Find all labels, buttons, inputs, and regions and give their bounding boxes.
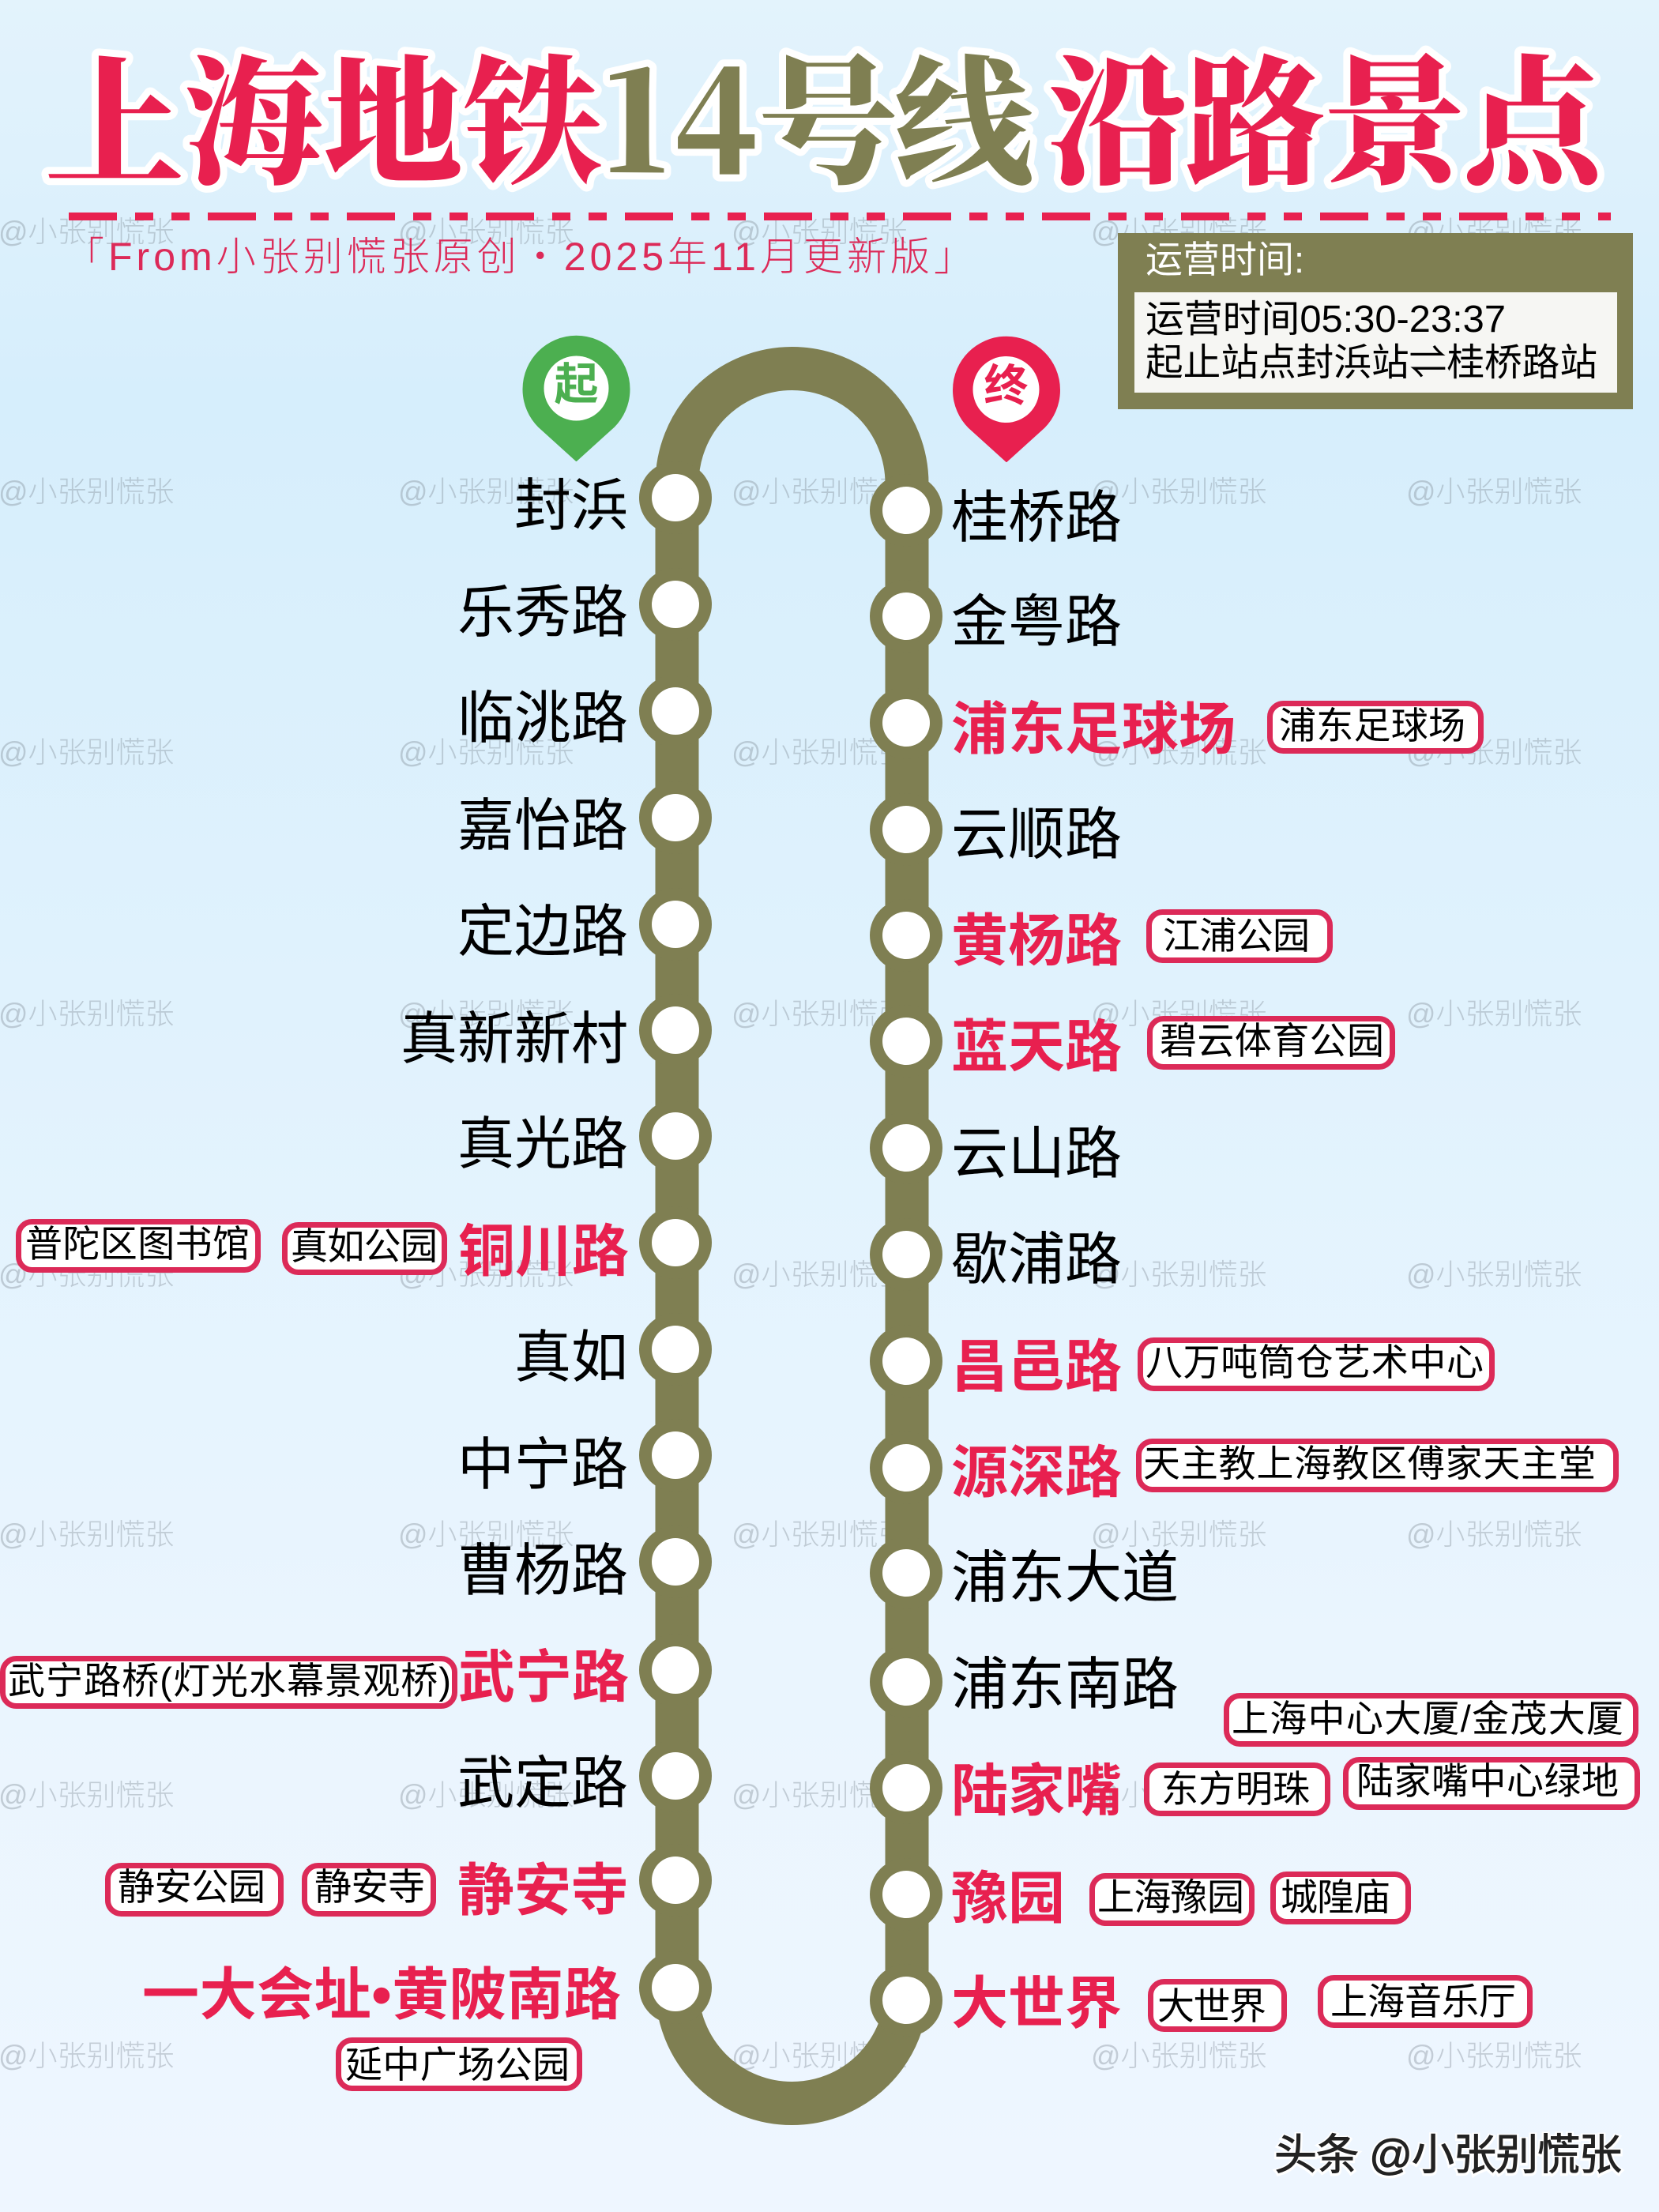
station: 昌邑路 [870,1325,1492,1399]
watermarks: @小张别慌张 [1406,1779,1582,1811]
station: 蓝天路 [870,1005,1392,1079]
tag: 上海中心大厦/金茂大厦: 上海中心大厦/金茂大厦 [1232,1698,1623,1740]
tag: 浦东足球场: 浦东足球场 [1279,705,1465,747]
watermarks: @小张别慌张 [1091,476,1267,508]
tag: 江浦公园: 江浦公园 [1163,915,1310,957]
watermarks: @小张别慌张 [0,216,175,248]
watermarks: @小张别慌张 [398,2040,574,2072]
title: 沿路景点 [1048,13,1613,213]
station: 曹杨路: 曹杨路 [457,1540,628,1603]
tag: 东方明珠: 东方明珠 [1161,1768,1310,1810]
watermarks: @小张别慌张 [732,1518,908,1551]
station: 真新新村: 真新新村 [401,1008,628,1071]
title: 号线 [758,13,1033,213]
title: 上海地铁 [45,13,602,213]
title [45,13,1613,213]
watermarks: @小张别慌张 [732,216,908,248]
watermarks: @小张别慌张 [732,736,908,769]
station: 真光路 [457,1100,712,1176]
tag: 碧云体育公园: 碧云体育公园 [1160,1020,1384,1062]
station: 临洮路 [457,675,712,750]
station: 云顺路 [870,793,1122,867]
watermarks: @小张别慌张 [732,476,908,508]
icon: end pin: 终 [984,361,1029,411]
watermarks: @小张别慌张 [0,1779,175,1811]
station: 豫园: 豫园 [951,1868,1065,1931]
tag: 大世界: 大世界 [1157,1985,1266,2027]
station: 曹杨路 [457,1525,712,1603]
panel body [1134,292,1617,393]
watermarks: @小张别慌张 [1091,1258,1267,1291]
station: 云山路 [870,1112,1122,1186]
station: 浦东足球场 [870,687,1480,762]
tag: 静安公园: 静安公园 [118,1866,265,1908]
station: 陆家嘴 [870,1751,1637,1824]
watermarks: @小张别慌张 [0,998,175,1030]
station: 乐秀路 [457,568,712,645]
tag: 陆家嘴中心绿地: 陆家嘴中心绿地 [1356,1760,1619,1802]
panel body: 起止站点封浜站⇌桂桥路站 [1146,342,1597,384]
tag: 普陀区图书馆: 普陀区图书馆 [25,1223,250,1265]
station: 桂桥路: 桂桥路 [951,487,1122,550]
footer credit: 头条 @小张别慌张 [1274,2132,1622,2180]
tag: 延中广场公园: 延中广场公园 [345,2044,570,2086]
watermarks: @小张别慌张 [1406,736,1582,769]
station: 嘉怡路 [457,781,712,858]
watermarks: @小张别慌张 [732,998,908,1030]
station: 临洮路: 临洮路 [457,687,628,750]
tag: 上海音乐厅: 上海音乐厅 [1330,1981,1516,2022]
icon: end pin [954,337,1059,461]
watermarks: @小张别慌张 [1091,2040,1267,2072]
station: 歇浦路 [870,1218,1122,1292]
station: 铜川路: 铜川路 [458,1221,629,1284]
tag: 真如公园: 真如公园 [291,1225,438,1267]
station: 黄杨路 [870,899,1330,973]
station: 武定路 [457,1740,712,1815]
watermarks: @小张别慌张 [398,1518,574,1551]
watermarks: @小张别慌张 [398,476,574,508]
station: 大世界: 大世界 [951,1973,1122,2036]
watermarks: @小张别慌张 [1091,736,1267,769]
watermarks: @小张别慌张 [0,1518,175,1551]
station: 武宁路: 武宁路 [458,1646,629,1710]
station: 浦东足球场: 浦东足球场 [951,698,1236,762]
station: 定边路: 定边路 [457,901,628,964]
subtitle: 「From小张别慌张原创・2025年11月更新版」 [65,235,973,279]
metro line loop [677,369,907,2104]
station: 真光路: 真光路 [457,1113,628,1176]
watermarks: @小张别慌张 [398,736,574,769]
watermarks: @小张别慌张 [1091,1518,1267,1551]
station: 浦东大道 [870,1537,1179,1610]
watermarks: @小张别慌张 [732,2040,908,2072]
panel body: 运营时间05:30-23:37 [1146,299,1506,340]
watermarks: @小张别慌张 [398,1779,574,1811]
tag: 上海豫园: 上海豫园 [1097,1876,1244,1918]
station: 封浜: 封浜 [514,475,628,538]
station: 一大会址•黄陂南路: 一大会址•黄陂南路 [142,1964,621,2027]
station: 大世界 [870,1964,1529,2037]
station: 陆家嘴: 陆家嘴 [951,1760,1122,1823]
station: 武宁路 [3,1634,712,1710]
station: 真新新村 [401,994,712,1071]
station: 静安寺: 静安寺 [457,1860,628,1923]
station: 乐秀路: 乐秀路 [457,581,628,645]
station: 浦东大道: 浦东大道 [951,1547,1179,1610]
panel heading: 运营时间: [1146,239,1304,280]
station: 铜川路 [19,1206,712,1284]
station: 真如 [514,1313,712,1390]
station: 武定路: 武定路 [457,1752,628,1815]
icon: start pin: 起 [555,359,599,409]
tag: 八万吨筒仓艺术中心: 八万吨筒仓艺术中心 [1146,1341,1484,1383]
station: 云顺路: 云顺路 [951,803,1122,867]
station: 中宁路: 中宁路 [457,1434,628,1497]
watermarks: @小张别慌张 [398,998,574,1030]
watermarks: @小张别慌张 [732,1779,908,1811]
station: 真如: 真如 [514,1326,628,1390]
station: 蓝天路: 蓝天路 [951,1016,1122,1079]
station: 定边路 [457,888,712,964]
watermarks: @小张别慌张 [732,1258,908,1291]
station: 浦东南路: 浦东南路 [951,1653,1179,1717]
tag: 城隍庙: 城隍庙 [1281,1876,1390,1918]
dashed divider [69,213,1611,220]
station: 昌邑路: 昌邑路 [951,1336,1122,1399]
watermarks: @小张别慌张 [1406,2040,1582,2072]
watermarks: @小张别慌张 [1406,216,1582,248]
station: 源深路 [870,1431,1616,1505]
watermarks: @小张别慌张 [0,1258,175,1291]
station: 静安寺 [107,1844,712,1923]
watermarks: @小张别慌张 [1091,1779,1267,1811]
watermarks: @小张别慌张 [398,1258,574,1291]
station: 浦东南路 [870,1646,1635,1744]
watermarks: @小张别慌张 [0,2040,175,2072]
footer credit: 头条 @小张别慌张 [1274,2131,1622,2179]
station: 中宁路 [457,1419,712,1497]
title: 14 [604,13,758,213]
station: 源深路: 源深路 [951,1442,1122,1505]
tag: 武宁路桥: 武宁路桥(灯光水幕景观桥) [8,1660,451,1702]
watermarks: @小张别慌张 [1406,476,1582,508]
station: 嘉怡路: 嘉怡路 [457,795,628,858]
watermarks: @小张别慌张 [1406,1518,1582,1551]
watermarks: @小张别慌张 [1406,1258,1582,1291]
watermarks: @小张别慌张 [398,216,574,248]
station: 豫园 [870,1858,1408,1931]
watermarks: @小张别慌张 [1406,998,1582,1030]
watermarks: @小张别慌张 [1091,216,1267,248]
watermarks: @小张别慌张 [1091,998,1267,1030]
station: 歇浦路: 歇浦路 [951,1228,1122,1292]
station: 黄杨路: 黄杨路 [951,910,1122,973]
panel: operating hours [1118,233,1633,409]
tag: 静安寺: 静安寺 [314,1866,425,1908]
tag: 天主教上海教区傅家天主堂: 天主教上海教区傅家天主堂 [1143,1443,1596,1484]
station: 封浜 [514,461,712,538]
watermarks: @小张别慌张 [0,736,175,769]
icon: start pin [523,337,629,461]
station: 桂桥路 [870,474,1122,550]
station: 金粤路 [870,580,1122,654]
station: 云山路: 云山路 [951,1123,1122,1186]
station: 金粤路: 金粤路 [951,591,1122,654]
station: 一大会址•黄陂南路 [142,1951,712,2089]
watermarks: @小张别慌张 [0,476,175,508]
